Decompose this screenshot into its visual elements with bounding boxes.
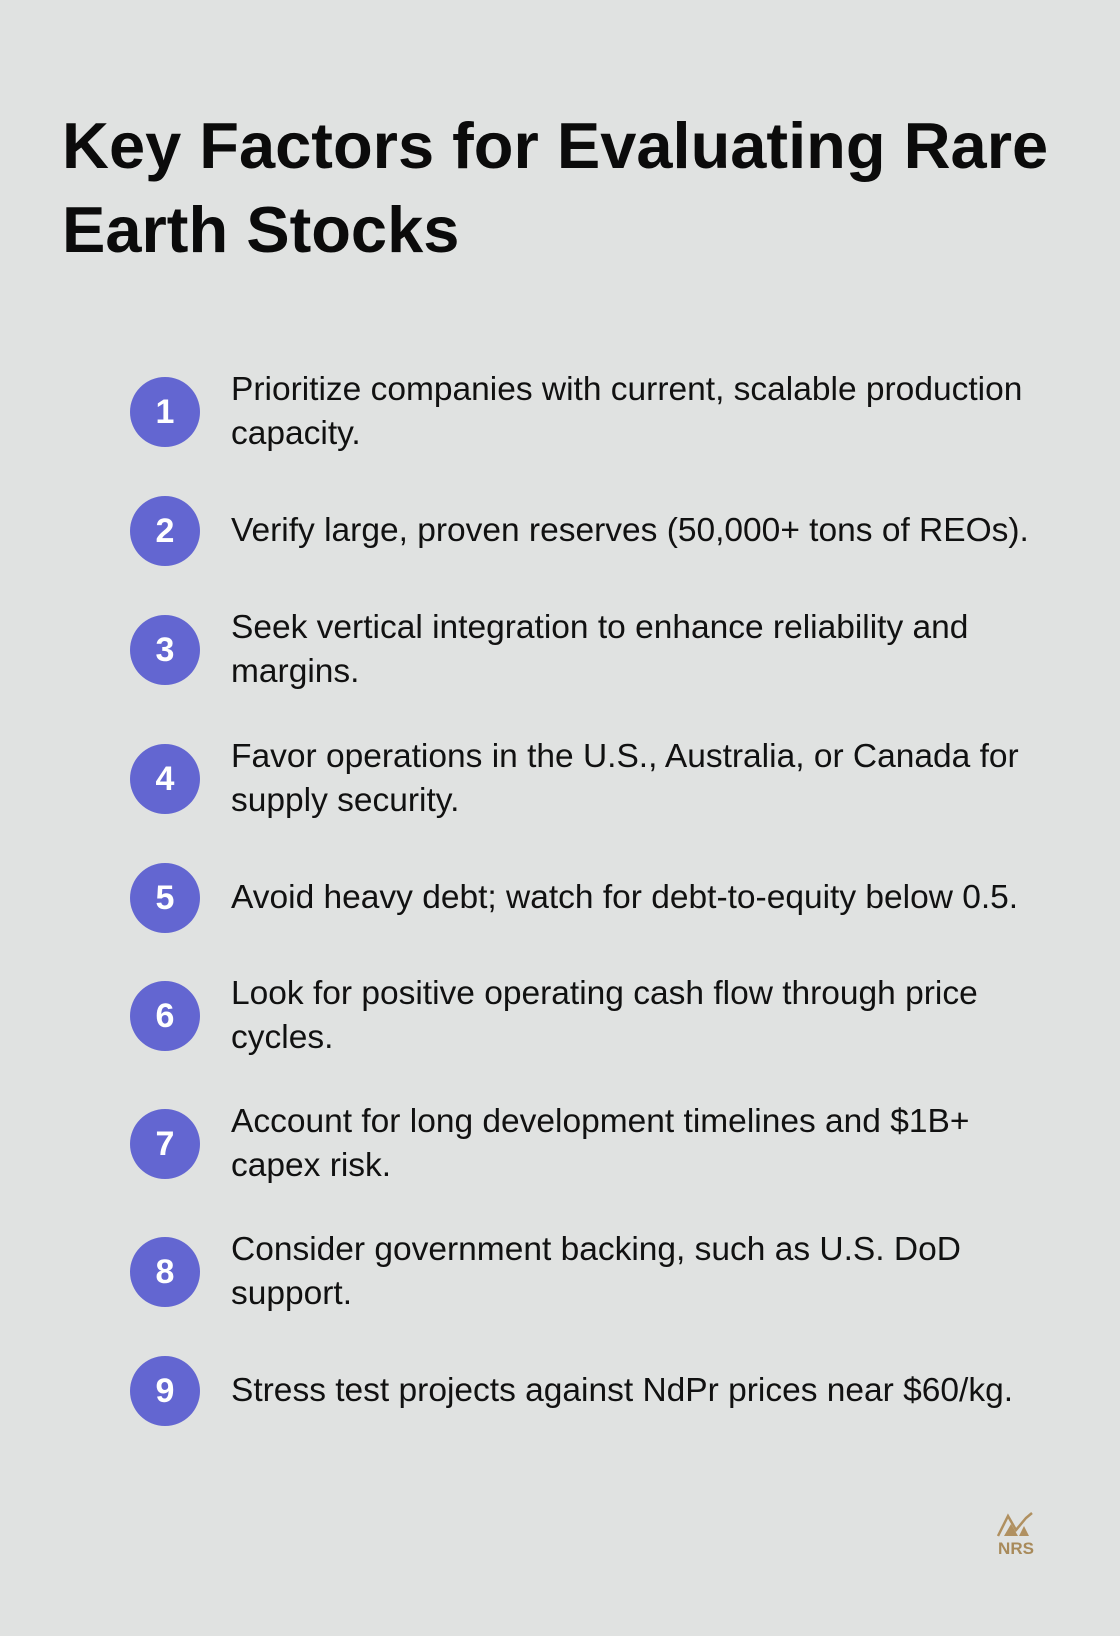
item 7: 7 — [156, 1125, 174, 1163]
item 8: Consider government backing, such as U.S. DoD — [231, 1231, 961, 1268]
item 9: Stress test projects against NdPr prices near $60/kg. — [231, 1372, 1013, 1409]
item 4: 4 — [156, 760, 174, 798]
item 3 — [130, 609, 968, 690]
item 8 — [130, 1231, 961, 1312]
item 2: Verify large, proven reserves (50,000+ tons of REOs). — [231, 512, 1029, 549]
item 2 — [130, 496, 1029, 566]
item 4 — [130, 738, 1019, 819]
item 3: margins. — [231, 653, 359, 690]
logo — [997, 1512, 1034, 1556]
item 1: Prioritize companies with current, scalable production — [231, 371, 1022, 408]
item 8: 8 — [156, 1253, 174, 1291]
item 5 — [130, 863, 1018, 933]
item 6: 6 — [156, 997, 174, 1035]
item 7 — [130, 1103, 969, 1184]
item 4: Favor operations in the U.S., Australia, or Canada for — [231, 738, 1019, 775]
item 8: support. — [231, 1275, 352, 1312]
item 5: 5 — [156, 879, 174, 917]
item 3: 3 — [156, 631, 174, 669]
item 1: capacity. — [231, 415, 361, 452]
title: Key Factors for Evaluating Rare — [62, 109, 1048, 182]
item 6 — [130, 975, 978, 1056]
item 5: Avoid heavy debt; watch for debt-to-equity below 0.5. — [231, 879, 1018, 916]
item 1: 1 — [156, 393, 174, 431]
item 7: capex risk. — [231, 1147, 391, 1184]
item 2: 2 — [156, 512, 174, 550]
item 3: Seek vertical integration to enhance reliability and — [231, 609, 968, 646]
item 6: cycles. — [231, 1019, 333, 1056]
item 6: Look for positive operating cash flow through price — [231, 975, 978, 1012]
title: Earth Stocks — [62, 193, 459, 266]
item 1 — [130, 371, 1022, 452]
item 4: supply security. — [231, 782, 459, 819]
item 9 — [130, 1356, 1013, 1426]
title — [62, 109, 1048, 266]
item 9: 9 — [156, 1372, 174, 1410]
item 7: Account for long development timelines and $1B+ — [231, 1103, 969, 1140]
